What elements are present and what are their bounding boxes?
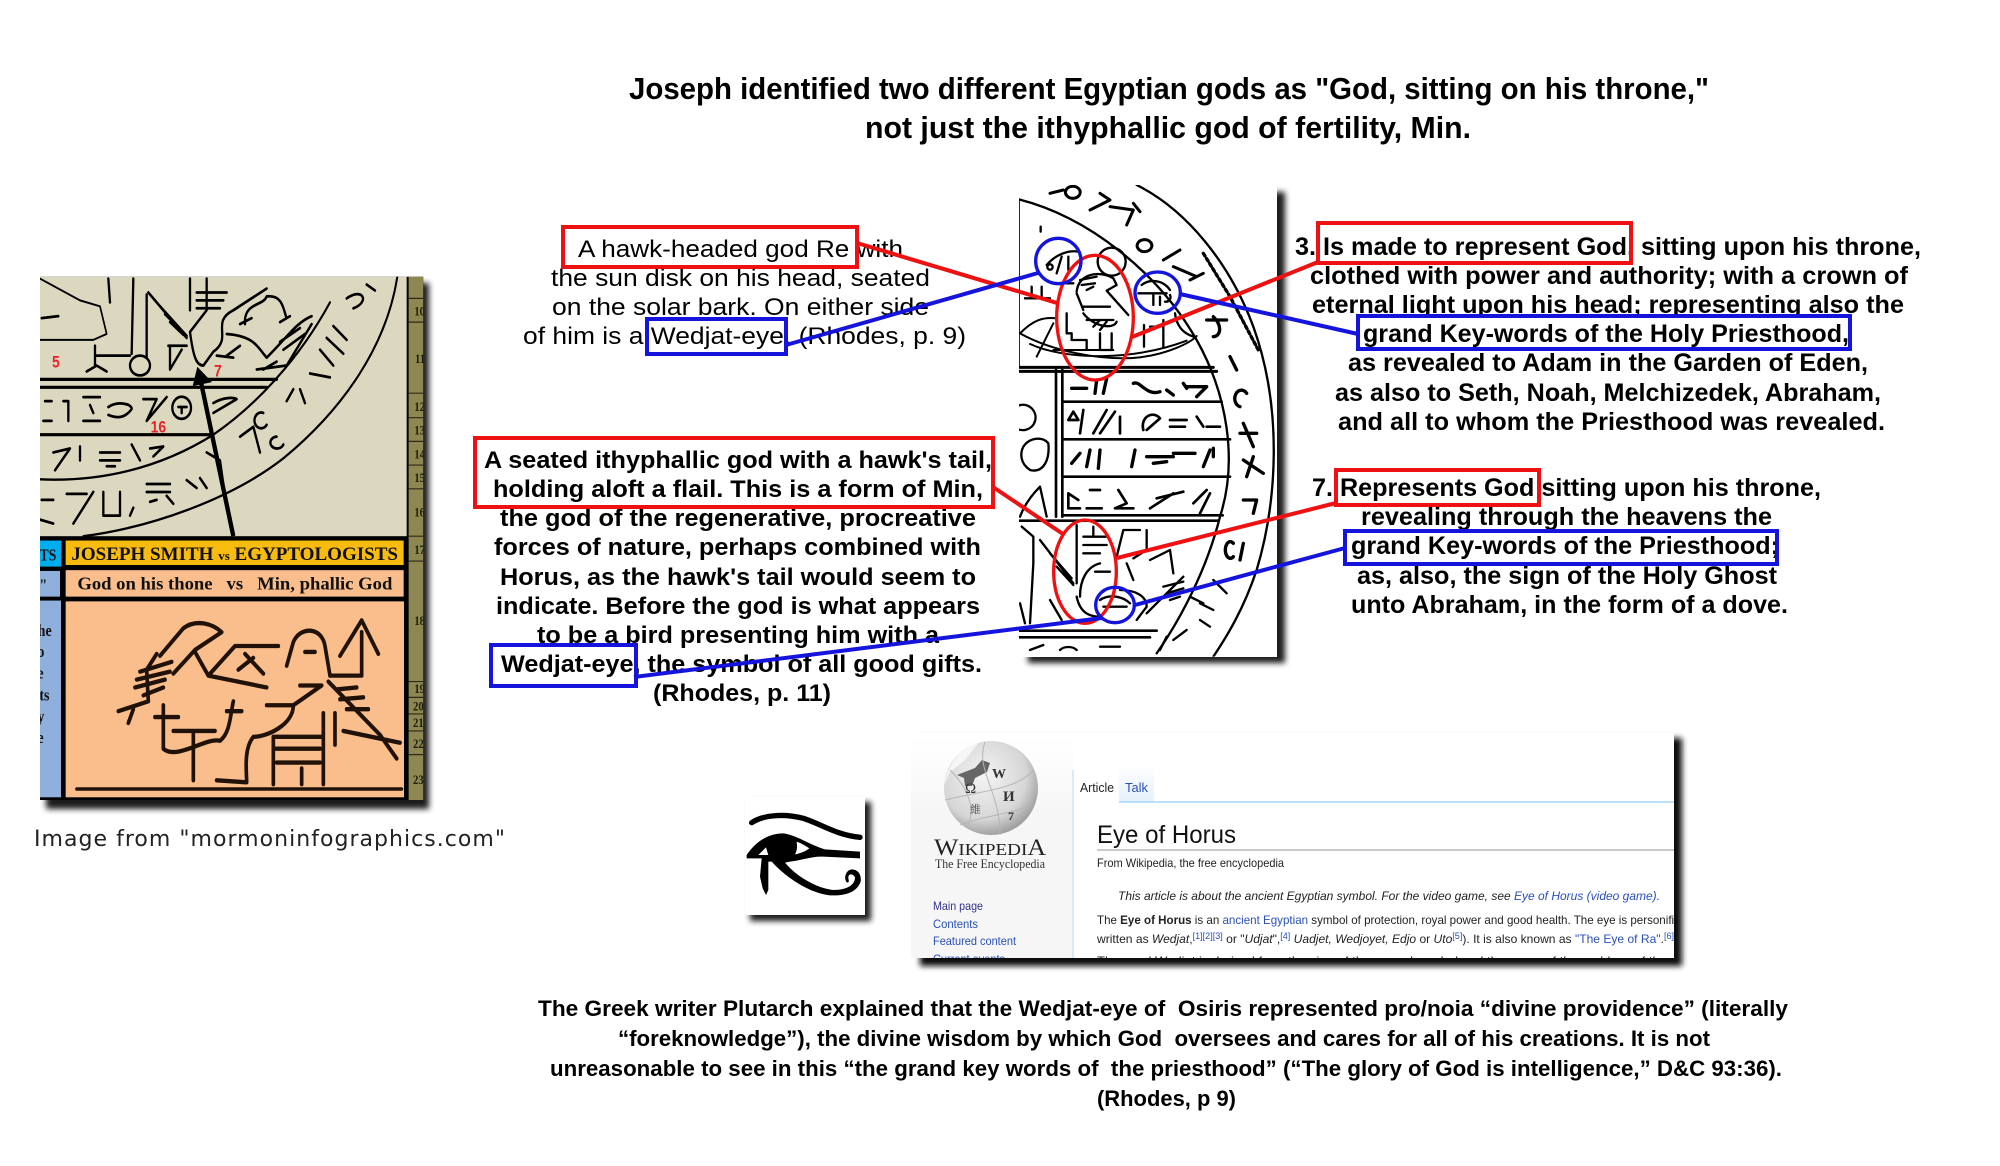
icon: Wikipedia globe: Ω [965,781,976,797]
red oval: Re / God seated upper [1057,255,1133,380]
article text: "The Eye of Ra". [1575,932,1664,946]
article text: [4] [1280,931,1290,941]
highlight box: Wedjat-eye upper [647,319,786,354]
connector: upper oval to explanation 3 [1132,262,1318,337]
article heading [1097,821,1674,870]
text block: ithyphallic god Min: Horus, as the hawk's tail would seem to [500,564,976,591]
panel: facsimile with circled figures [1010,185,1285,663]
sidebar [911,806,1072,958]
facsimile line drawing [1010,185,1274,657]
olive number column: 14 [414,448,425,462]
icon: Wikipedia globe: 維 [970,801,981,817]
text block: hawk-headed god Re: A hawk-headed god Re with [578,236,903,263]
panel: Joseph Smith vs Egyptologists facsimile comparison [37,277,429,809]
cyan column fragment: he [38,622,52,640]
sidebar navigation [934,902,1016,958]
article text: Uadjet, Wedjoyet, Edjo [1290,932,1416,946]
cyan column fragment: o [37,643,45,661]
article text: or Uto [1419,932,1452,946]
cyan column fragment: ts [39,686,49,705]
text block: explanation 7: unto Abraham, in the form of a dove. [1351,591,1788,619]
text block: explanation 3: as also to Seth, Noah, Melchizedek, Abraham, [1335,379,1881,407]
blue circle: left Wedjat-eye [1036,238,1081,284]
red reference numbers: 16 [151,419,166,437]
article text: [5] [1452,931,1462,941]
connector: lower circle to Priesthood box [1135,548,1345,605]
article text: written as Wedjat, [1097,932,1193,946]
cyan column fragment: e [37,664,44,683]
article text: [6] [1664,931,1674,941]
red oval: Min seated lower [1054,520,1116,623]
highlight box: A hawk-headed god Re [563,227,857,267]
cyan column fragment: TS [39,546,56,565]
icon: Wikipedia globe [944,741,1038,835]
highlight box: Represents God [1336,470,1539,505]
olive number column: 18 [414,614,425,628]
footer text: Plutarch explanation: unreasonable to see in this “the grand key words of the priesthood” (“The glory of God is intelligence,” D&C 93:36). [550,1056,1782,1081]
text block: explanation 7 [1312,474,1821,619]
text block: explanation 3: and all to whom the Priesthood was revealed. [1338,408,1885,436]
title [629,71,1709,145]
text block: explanation 7: as, also, the sign of the Holy Ghost [1357,562,1778,590]
title: Joseph identified two different Egyptian gods as "God, sitting on his throne," [629,71,1709,106]
cyan column fragment [40,540,62,798]
highlight box: grand Key-words of the Priesthood [1345,531,1777,564]
panel: Wikipedia Eye of Horus screenshot [911,733,1687,968]
text block: hawk-headed god Re: on the solar bark. On either side [552,294,929,321]
wordmark: WIKIPEDI A [934,835,1046,860]
olive number column: 10 [414,305,425,319]
olive number column: 16 [414,506,425,520]
text block: ithyphallic god Min: holding aloft a flail. This is a form of Min, [493,476,983,503]
text block: ithyphallic god Min: forces of nature, perhaps combined with [494,534,981,561]
connector: Wedjat box to lower circle [634,618,1102,677]
connector: Wedjat box to left eye [786,273,1038,345]
article heading: From Wikipedia, the free encyclopedia [1097,856,1284,870]
caption: image source: Image from "mormoninfographics.com" [34,827,505,852]
cyan column fragment: y [37,708,45,726]
title: not just the ithyphallic god of fertility, Min. [865,110,1471,145]
highlight box: seated ithyphallic god [475,438,993,507]
sidebar navigation: Current events [933,952,1005,966]
highlight box: Is made to represent God [1318,223,1631,263]
cyan column fragment: " [39,577,47,595]
text block: hawk-headed god Re [523,236,966,350]
olive number column: 19 [414,682,425,696]
article text: Udjat", [1244,932,1280,946]
olive number column: 12 [414,400,425,414]
connector: Min box to lower oval [993,487,1063,534]
article text: [1][2][3] [1193,931,1223,941]
text block: ithyphallic god Min: the god of the regenerative, procreative [500,505,976,532]
article heading: Eye of Horus [1097,821,1236,849]
yellow banner: JOSEPH SMITH vs EGYPTOLOGISTS [71,544,398,564]
footer text: Plutarch explanation: (Rhodes, p 9) [1097,1086,1236,1111]
text block: hawk-headed god Re: the sun disk on his head, seated [551,265,930,292]
blue circle: right Wedjat-eye [1135,272,1180,313]
text block: explanation 3: 3. Is made to represent God, sitting upon his throne, [1295,233,1921,261]
red reference numbers [52,353,222,437]
sidebar navigation: Featured content [933,934,1017,948]
icon: Wikipedia globe: И [1003,789,1015,805]
sidebar navigation: Main page [933,899,983,913]
footer text: Plutarch explanation: The Greek writer Plutarch explained that the Wedjat-eye of Osiris represented pro/noia “divine providence” (literally [538,996,1788,1021]
olive number column: 22 [413,737,424,751]
text block: explanation 3 [1295,233,1921,436]
olive number column: 13 [414,424,425,438]
text block: explanation 3: as revealed to Adam in the Garden of Eden, [1348,349,1868,377]
text block: ithyphallic god Min [484,447,992,707]
upper facsimile drawing [40,277,397,536]
text block: hawk-headed god Re: of him is a Wedjat-eye. (Rhodes, p. 9) [523,323,966,350]
icon: Eye of Horus [745,797,871,921]
text block: ithyphallic god Min: Wedjat-eye, the symbol of all good gifts. [501,651,982,678]
footer text: Plutarch explanation [538,996,1788,1111]
olive number column: 21 [413,716,424,730]
peach subtitle: God on his thone vs Min, phallic God [77,575,392,594]
article text: The word Wedjat is derived from the sign of the sacred symbol and the name of the goddess of the [1097,954,1667,968]
text block: explanation 7: 7. Represents God sitting upon his throne, [1312,474,1821,502]
olive number column: 23 [413,773,424,787]
tabs [1080,776,1674,803]
wordmark [934,840,1046,870]
olive number column: 15 [414,471,425,485]
text block: ithyphallic god Min: A seated ithyphallic god with a hawk's tail, [484,447,992,474]
red reference numbers: 7 [214,363,222,381]
article text: or " [1223,932,1244,946]
article text: ). It is also known as [1462,932,1575,946]
text block: explanation 3: eternal light upon his head; representing also the [1312,291,1904,319]
connector: right eye to Holy Priesthood box [1180,294,1358,334]
olive number column: 20 [413,700,424,714]
peach subtitle [66,570,404,597]
text block: explanation 7: revealing through the heavens the [1361,503,1772,531]
article text: The Eye of Horus is an ancient Egyptian symbol of protection, royal power and good health. The eye is personified [1097,913,1687,927]
blue circle: lower Wedjat-eye [1096,587,1134,623]
peach drawing: seated god and bird [66,601,404,797]
tabs: Article [1080,780,1114,795]
text block: explanation 7: grand Key-words of the Priesthood; [1351,532,1779,560]
highlight box: grand Key-words of the Holy Priesthood [1358,316,1850,349]
red reference numbers: 5 [52,353,60,372]
icon: Wikipedia globe: 7 [1008,809,1014,823]
article text: This article is about the ancient Egyptian symbol. For the video game, see Eye of Horus (video game). [1118,889,1660,903]
text block: ithyphallic god Min: indicate. Before the god is what appears [496,593,980,620]
olive number column: 17 [414,543,425,557]
tabs: Talk [1125,780,1148,795]
olive number column [409,277,425,800]
cyan column fragment: e [37,729,44,747]
wordmark: The Free Encyclopedia [935,856,1045,871]
text block: explanation 3: clothed with power and authority; with a crown of [1310,262,1909,290]
icon: Wikipedia globe: W [992,767,1006,782]
text block: ithyphallic god Min: (Rhodes, p. 11) [653,680,831,707]
connector: lower oval to explanation 7 [1117,503,1336,558]
olive number column: 11 [415,352,425,366]
connector: Re box to upper oval [857,243,1057,303]
footer text: Plutarch explanation: “foreknowledge”), the divine wisdom by which God oversees and cares for all of his creations. It is not [618,1026,1710,1051]
arrow [193,367,233,536]
article text [1097,891,1674,958]
sidebar navigation: Contents [933,917,978,931]
text block: explanation 3: grand Key-words of the Holy Priesthood, [1363,320,1849,348]
highlight box: Wedjat-eye lower [491,645,636,686]
text block: ithyphallic god Min: to be a bird presenting him with a [537,622,940,649]
